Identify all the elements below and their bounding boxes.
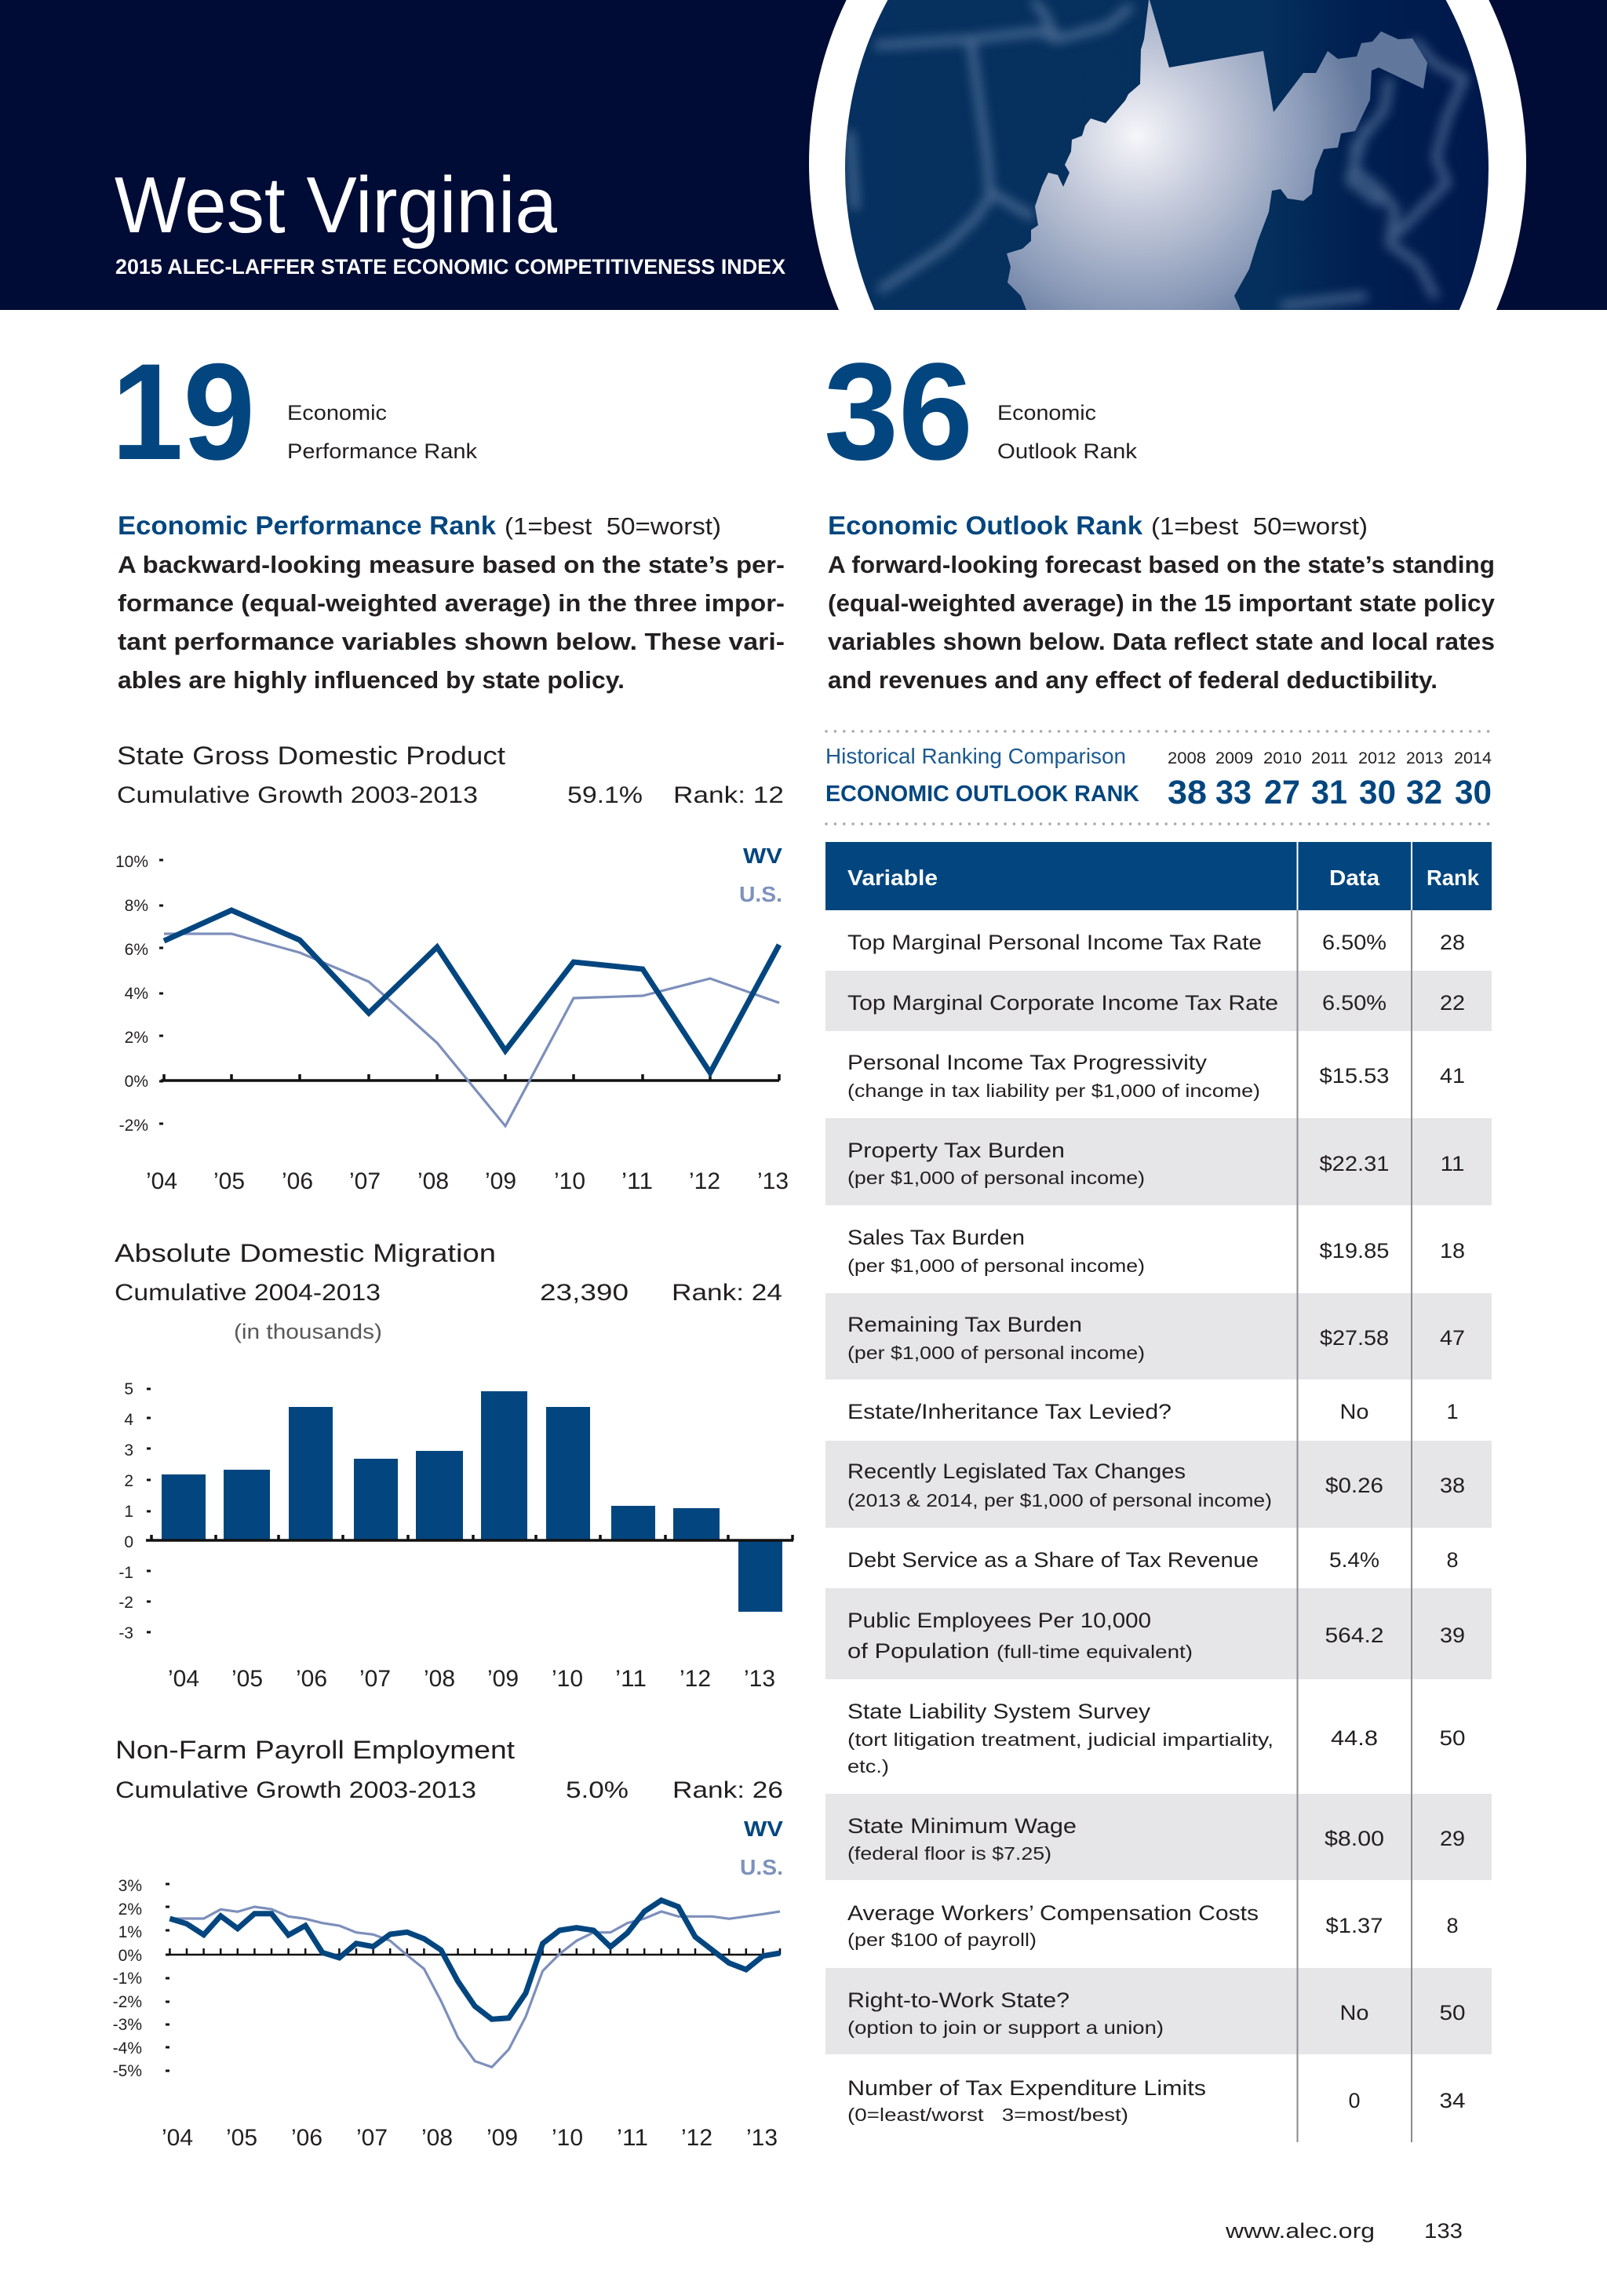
row: state liability system survey: 50 (1439, 1726, 1466, 1750)
year labels: 2010 (1263, 749, 1302, 767)
y axis labels: 3% (118, 1877, 142, 1895)
row: debt service (825, 1528, 1492, 1588)
y axis labels: 2% (118, 1901, 142, 1919)
text block: economic outlook rank description: A forward-looking forecast based on the state’s standing (828, 551, 1495, 578)
rank values: 33 (1215, 774, 1252, 811)
y axis labels: 2% (125, 1029, 148, 1047)
row: personal income tax progressivity: 41 (1440, 1064, 1465, 1088)
rank values: 32 (1406, 774, 1442, 811)
year labels: 2012 (1358, 749, 1396, 767)
row: sales tax burden (825, 1205, 1492, 1293)
row: debt service: 8 (1446, 1548, 1459, 1572)
year labels: 2013 (1406, 749, 1443, 767)
text block: economic outlook rank description: (1=best 50=worst) (1151, 512, 1368, 540)
y axis labels: -2% (113, 1993, 142, 2011)
row: property tax burden: $22.31 (1320, 1152, 1389, 1175)
year labels (1168, 749, 1492, 767)
y axis labels (115, 853, 163, 1135)
text block: economic performance rank description: Economic Performance Rank (118, 511, 497, 540)
heading: state gross domestic product: Cumulative Growth 2003-2013 (117, 782, 478, 808)
y axis labels: -1 (118, 1564, 133, 1582)
chart legend: U.S. (739, 882, 782, 906)
y axis labels: 4 (124, 1411, 133, 1429)
row: state liability system survey: 44.8 (1331, 1726, 1378, 1750)
x axis labels: ’09 (487, 1666, 519, 1692)
y axis labels: 10% (115, 853, 148, 871)
row: recently legislated tax changes: 38 (1440, 1474, 1465, 1497)
x axis labels: ’10 (552, 2125, 583, 2151)
table header: Rank (1427, 866, 1479, 890)
y axis labels: 3 (124, 1441, 133, 1460)
rank caption: Outlook Rank (997, 439, 1138, 463)
row: top marginal personal income tax rate: 6.50% (1322, 931, 1387, 954)
y axis labels: -3% (113, 2016, 142, 2034)
row: estate/inheritance tax levied: 1 (1446, 1400, 1459, 1423)
year labels: 2009 (1215, 749, 1253, 767)
rank caption (997, 401, 1138, 463)
row: top marginal personal income tax rate (825, 910, 1492, 971)
rank number: economic performance 19 (111, 336, 478, 489)
x axis labels: ’07 (359, 1666, 391, 1692)
x axis labels: ’06 (291, 2125, 322, 2151)
row: public employees: (full-time equivalent) (997, 1642, 1193, 1662)
table: outlook policy variables (825, 842, 1492, 2142)
x axis labels: ’10 (552, 1666, 583, 1692)
row: personal income tax progressivity: Personal Income Tax Progressivity (847, 1051, 1208, 1074)
row: sales tax burden: Sales Tax Burden (847, 1226, 1025, 1249)
rank values: 31 (1311, 774, 1347, 811)
x axis labels: ’04 (168, 1666, 199, 1692)
row: sales tax burden: (per $1,000 of personal income) (847, 1256, 1145, 1276)
row: recently legislated tax changes (825, 1441, 1492, 1528)
x axis labels: ’07 (349, 1168, 381, 1194)
x axis labels: ’13 (757, 1168, 789, 1194)
historical ranking comparison (825, 744, 1492, 811)
row: workers compensation: $1.37 (1326, 1914, 1383, 1937)
heading: absolute domestic migration (115, 1239, 782, 1343)
heading: non-farm payroll employment: Non-Farm Payroll Employment (115, 1736, 515, 1764)
row: sales tax burden: 18 (1440, 1239, 1465, 1263)
chart legend (739, 844, 782, 906)
table header (825, 842, 1492, 910)
rank caption: Performance Rank (287, 439, 478, 463)
footer (1225, 2219, 1463, 2243)
subtitle: 2015 ALEC-LAFFER STATE ECONOMIC COMPETITIVENESS INDEX (115, 255, 785, 279)
text block: economic outlook rank description: and revenues and any effect of federal deductibility. (828, 666, 1438, 694)
row: state minimum wage: State Minimum Wage (847, 1814, 1077, 1838)
row: top marginal personal income tax rate: 28 (1440, 931, 1465, 954)
heading: absolute domestic migration: 23,390 (540, 1280, 629, 1306)
x axis labels: ’12 (680, 1666, 711, 1692)
heading: state gross domestic product: State Gross Domestic Product (117, 742, 505, 770)
x axis labels (146, 1168, 789, 1194)
year labels: 2011 (1311, 749, 1348, 767)
row: state minimum wage (825, 1794, 1492, 1880)
row: top marginal personal income tax rate: Top Marginal Personal Income Tax Rate (847, 931, 1262, 954)
historical ranking comparison: ECONOMIC OUTLOOK RANK (825, 782, 1139, 807)
heading: non-farm payroll employment: Rank: 26 (672, 1777, 783, 1803)
row: right-to-work state: Right-to-Work State? (847, 1988, 1070, 2012)
rank number: economic outlook 36: 36 (824, 335, 973, 489)
x axis labels: ’06 (296, 1666, 327, 1692)
rank values (1168, 774, 1492, 811)
table header: Variable (847, 866, 938, 890)
rank number: economic outlook 36 (824, 335, 1138, 489)
map medallion: West Virginia state in a circle (809, 0, 1526, 310)
row: state liability system survey (825, 1679, 1492, 1794)
x axis labels: ’08 (424, 1666, 455, 1692)
row: remaining tax burden: $27.58 (1320, 1326, 1389, 1350)
x axis labels: ’09 (485, 1168, 516, 1194)
y axis labels: 6% (125, 941, 148, 959)
header banner (0, 0, 1607, 310)
heading: non-farm payroll employment: 5.0% (566, 1777, 629, 1803)
row: public employees: 564.2 (1325, 1624, 1384, 1647)
row: tax expenditure limits: (0=least/worst 3=most/best) (847, 2105, 1128, 2125)
text block: economic performance rank description: tant performance variables shown below. These vari- (118, 628, 785, 655)
row: public employees: 39 (1440, 1624, 1465, 1647)
x axis labels: ’10 (554, 1168, 585, 1194)
row: property tax burden (825, 1118, 1492, 1205)
heading: state gross domestic product (117, 742, 784, 808)
title: West Virginia (115, 162, 558, 250)
x axis labels: ’08 (417, 1168, 449, 1194)
row: property tax burden: (per $1,000 of personal income) (847, 1168, 1145, 1188)
x axis labels: ’11 (621, 1168, 653, 1194)
row: remaining tax burden: 47 (1440, 1326, 1465, 1350)
U.S. line (169, 1907, 780, 2067)
row: remaining tax burden: Remaining Tax Burden (847, 1313, 1082, 1336)
row: right-to-work state: (option to join or support a union) (847, 2017, 1164, 2038)
x axis labels: ’05 (226, 2125, 257, 2151)
heading: non-farm payroll employment: Cumulative Growth 2003-2013 (115, 1777, 476, 1803)
y axis labels: 0% (125, 1073, 148, 1091)
x axis labels: ’11 (617, 2125, 648, 2151)
row: property tax burden: 11 (1441, 1152, 1464, 1175)
text block: economic outlook rank description (828, 511, 1496, 694)
text block: economic outlook rank description: Economic Outlook Rank (828, 511, 1143, 540)
rank values: 38 (1168, 774, 1207, 811)
row: remaining tax burden: (per $1,000 of personal income) (847, 1343, 1145, 1363)
x axis labels: ’04 (162, 2125, 193, 2151)
row: top marginal corporate income tax rate: 22 (1440, 991, 1465, 1015)
text block: economic performance rank description: ables are highly influenced by state policy. (118, 666, 625, 694)
y axis labels: 1% (118, 1923, 142, 1941)
row: top marginal corporate income tax rate: 6.50% (1322, 991, 1387, 1015)
y axis labels: 1 (124, 1503, 133, 1521)
chart legend: U.S. (740, 1855, 783, 1879)
rank values: 30 (1455, 774, 1492, 811)
row: state minimum wage: $8.00 (1325, 1827, 1384, 1850)
text block: economic performance rank description (118, 511, 785, 694)
rank number: economic performance 19: 19 (111, 336, 255, 489)
row: recently legislated tax changes: (2013 & 2014, per $1,000 of personal income) (847, 1490, 1272, 1511)
y axis labels: -4% (113, 2039, 142, 2057)
year labels: 2008 (1168, 749, 1206, 767)
row: state liability system survey: State Liability System Survey (847, 1700, 1151, 1723)
x axis labels: ’13 (744, 1666, 775, 1692)
row: right-to-work state: 50 (1439, 2001, 1466, 2024)
row: personal income tax progressivity (825, 1031, 1492, 1118)
row: public employees: Public Employees Per 10,000 (847, 1609, 1151, 1632)
row: top marginal corporate income tax rate: Top Marginal Corporate Income Tax Rate (847, 991, 1278, 1015)
x axis labels: ’12 (689, 1168, 720, 1194)
row: workers compensation: Average Workers’ Compensation Costs (847, 1901, 1259, 1925)
row: top marginal corporate income tax rate (825, 971, 1492, 1031)
y axis labels: 4% (125, 985, 148, 1003)
heading: non-farm payroll employment (115, 1736, 783, 1803)
row: sales tax burden: $19.85 (1320, 1239, 1389, 1263)
historical ranking comparison: Historical Ranking Comparison (825, 744, 1126, 768)
text block: economic performance rank description: A backward-looking measure based on the state’s per- (118, 551, 785, 578)
row: workers compensation: (per $100 of payroll) (847, 1930, 1037, 1950)
y axis labels: 0% (118, 1947, 142, 1965)
x axis labels: ’04 (146, 1168, 177, 1194)
x axis labels: ’08 (421, 2125, 453, 2151)
footer: www.alec.org (1225, 2219, 1375, 2243)
heading: absolute domestic migration: Cumulative 2004-2013 (115, 1280, 381, 1306)
row: right-to-work state: No (1340, 2001, 1368, 2024)
row: recently legislated tax changes: Recently Legislated Tax Changes (847, 1460, 1186, 1483)
row: tax expenditure limits: 34 (1439, 2089, 1466, 2112)
rank values: 30 (1359, 774, 1396, 811)
row: estate/inheritance tax levied (825, 1379, 1492, 1441)
y axis labels: 0 (124, 1533, 133, 1551)
row: state minimum wage: 29 (1440, 1827, 1465, 1850)
heading: state gross domestic product: Rank: 12 (673, 782, 784, 808)
x axis labels: ’12 (681, 2125, 712, 2151)
row: public employees (825, 1588, 1492, 1679)
row: estate/inheritance tax levied: Estate/Inheritance Tax Levied? (847, 1400, 1172, 1423)
y axis labels: -2% (119, 1117, 148, 1135)
y axis labels (113, 1877, 169, 2080)
bar chart: domestic migration (118, 1380, 793, 1692)
x axis labels: ’07 (356, 2125, 388, 2151)
line chart: state GDP growth (115, 844, 789, 1194)
heading: absolute domestic migration: Rank: 24 (672, 1280, 782, 1306)
row: personal income tax progressivity: (change in tax liability per $1,000 of income) (847, 1081, 1260, 1101)
text block: economic performance rank description: (1=best 50=worst) (505, 512, 721, 540)
rank caption (287, 401, 478, 463)
rank caption: Economic (997, 401, 1096, 425)
row: workers compensation: 8 (1446, 1914, 1459, 1937)
y axis labels: -3 (118, 1624, 133, 1642)
x axis labels: ’05 (213, 1168, 245, 1194)
y axis labels: -1% (113, 1970, 142, 1988)
year labels: 2014 (1454, 749, 1492, 767)
row: remaining tax burden (825, 1293, 1492, 1379)
bars (162, 1391, 782, 1612)
y axis labels: 5 (124, 1380, 133, 1398)
heading: absolute domestic migration: Absolute Domestic Migration (115, 1239, 496, 1267)
rank caption: Economic (287, 401, 387, 425)
text block: economic outlook rank description: (equal-weighted average) in the 15 important state policy (828, 589, 1496, 617)
text block: economic performance rank description: formance (equal-weighted average) in the three impor- (118, 589, 785, 617)
chart legend: WV (743, 844, 782, 868)
x axis labels: ’13 (746, 2125, 778, 2151)
WV line (164, 910, 779, 1073)
table header: Data (1329, 866, 1379, 890)
row: state minimum wage: (federal floor is $7.25) (847, 1843, 1051, 1864)
y axis labels: -2 (118, 1594, 133, 1612)
row: state liability system survey: (tort litigation treatment, judicial impartiality, (847, 1729, 1274, 1750)
row: public employees: of Population (847, 1639, 989, 1663)
x axis labels: ’06 (282, 1168, 313, 1194)
y axis labels (118, 1380, 151, 1642)
heading: absolute domestic migration: (in thousands) (234, 1320, 382, 1343)
x axis labels: ’09 (486, 2125, 518, 2151)
row: estate/inheritance tax levied: No (1340, 1400, 1368, 1423)
x axis labels (162, 2125, 778, 2151)
row: tax expenditure limits: Number of Tax Expenditure Limits (847, 2076, 1206, 2100)
y axis labels: 2 (124, 1472, 133, 1490)
row: right-to-work state (825, 1968, 1492, 2054)
row: tax expenditure limits (847, 2076, 1466, 2125)
text block: economic outlook rank description: variables shown below. Data reflect state and local rates (828, 628, 1495, 655)
row: state liability system survey: etc.) (847, 1756, 889, 1777)
line chart: non-farm payroll employment (113, 1817, 783, 2151)
footer: 133 (1424, 2219, 1463, 2243)
x axis labels (168, 1666, 775, 1692)
heading: state gross domestic product: 59.1% (567, 782, 643, 808)
chart legend (740, 1817, 783, 1879)
row: personal income tax progressivity: $15.53 (1320, 1064, 1389, 1088)
x axis labels: ’11 (615, 1666, 647, 1692)
rank values: 27 (1264, 774, 1300, 811)
row: property tax burden: Property Tax Burden (847, 1139, 1065, 1162)
chart legend: WV (744, 1817, 783, 1841)
row: tax expenditure limits: 0 (1348, 2089, 1361, 2112)
row: debt service: Debt Service as a Share of Tax Revenue (847, 1548, 1259, 1572)
y axis labels: 8% (125, 897, 148, 915)
WV line (169, 1901, 780, 2019)
row: recently legislated tax changes: $0.26 (1325, 1474, 1383, 1497)
U.S. line (164, 934, 779, 1126)
y axis labels: -5% (113, 2062, 142, 2080)
x axis labels: ’05 (231, 1666, 263, 1692)
row: workers compensation (825, 1880, 1492, 1968)
row: debt service: 5.4% (1329, 1548, 1379, 1572)
